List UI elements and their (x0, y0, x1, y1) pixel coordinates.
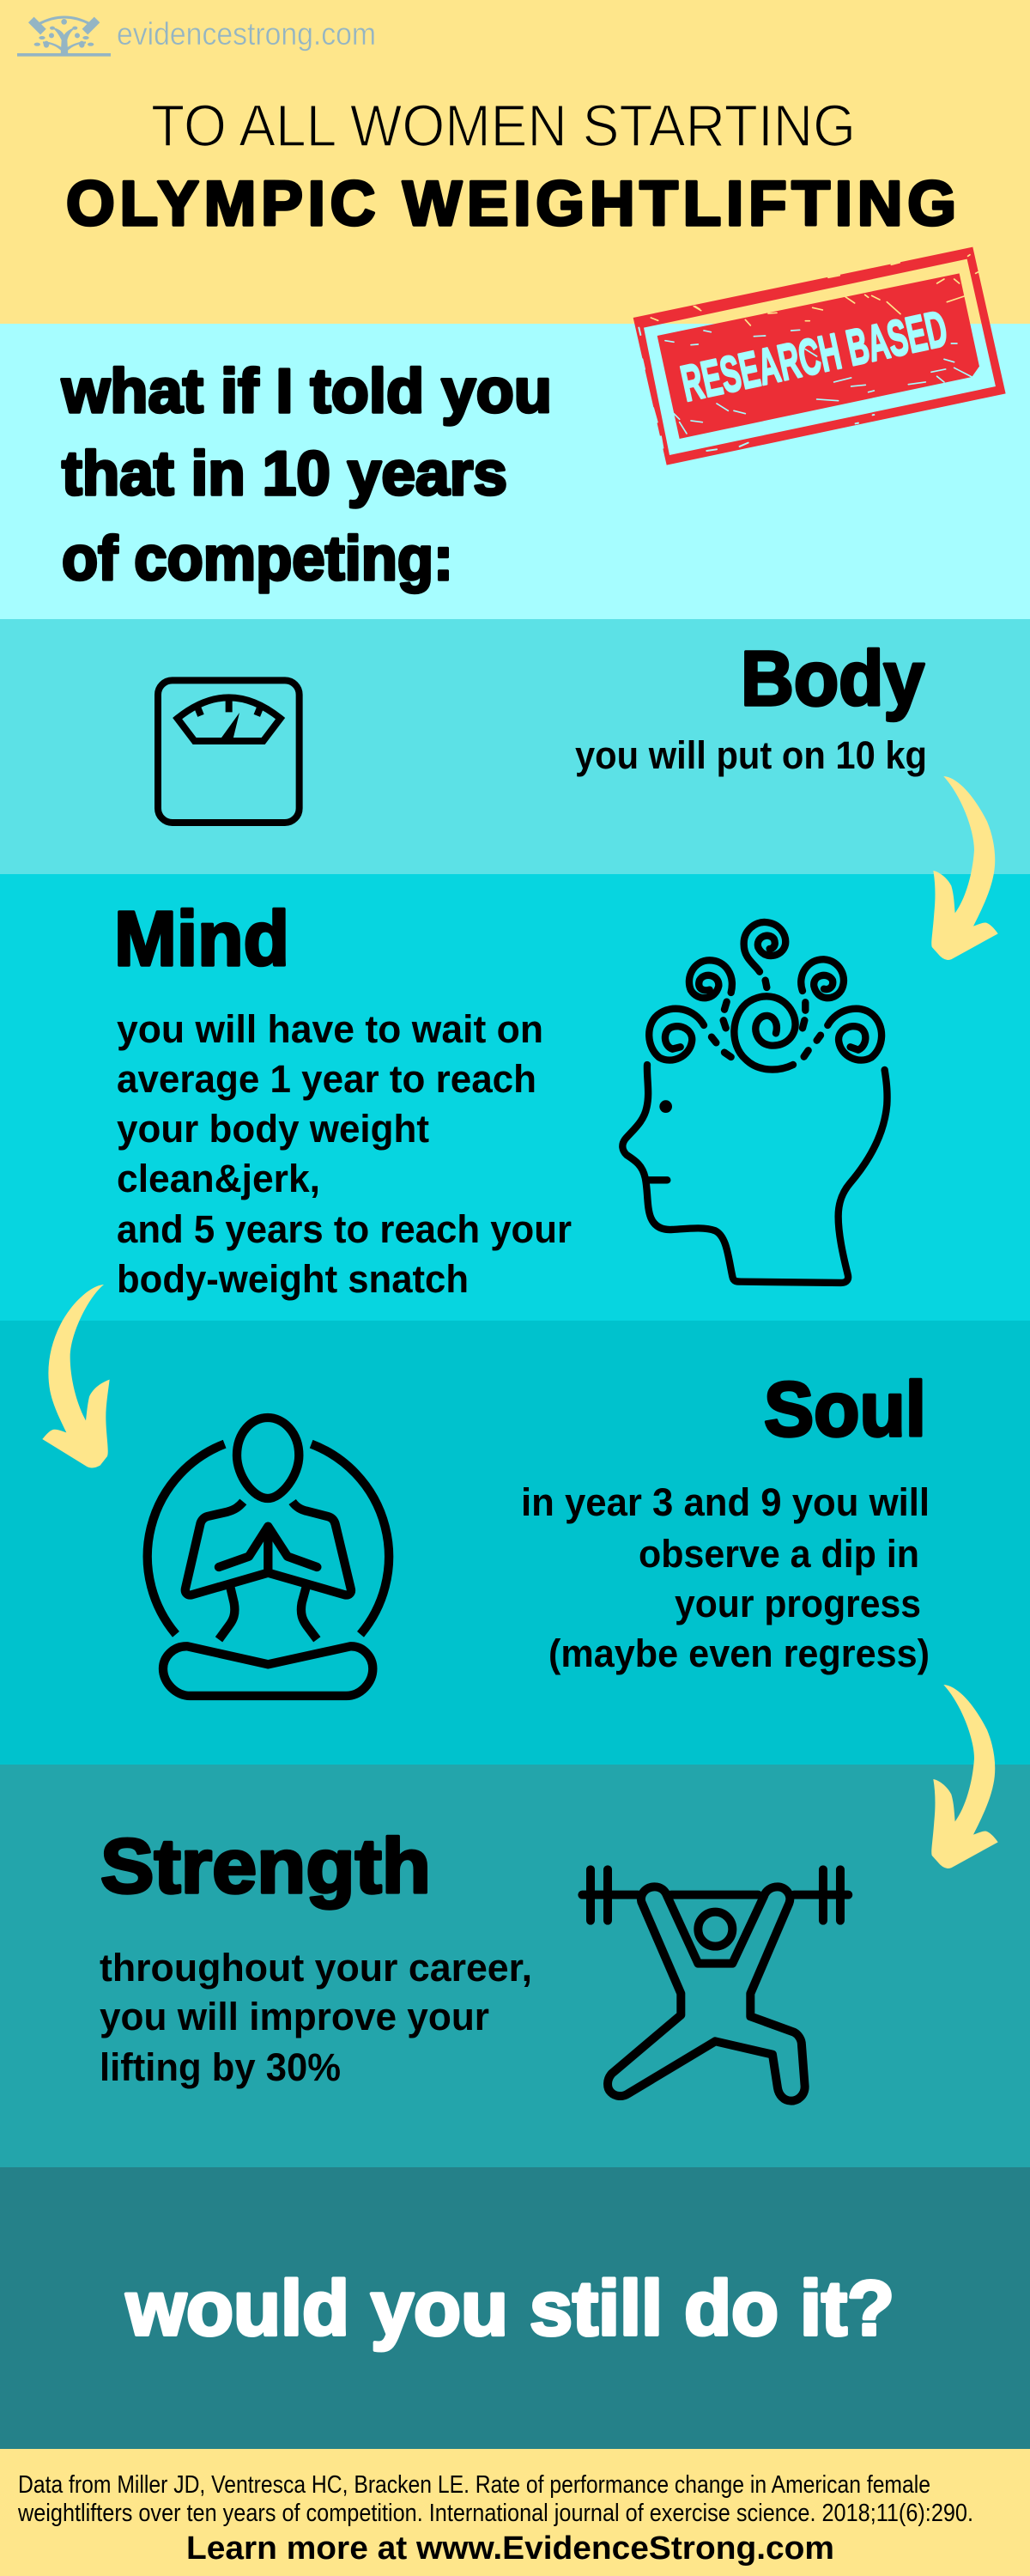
intro text: of competing: (62, 525, 453, 593)
icon: bathroom scale (158, 680, 300, 823)
panel content: strength (100, 1824, 848, 2101)
panel content: mind (114, 896, 888, 1301)
stamp inner block (657, 273, 979, 439)
text: mind description: your body weight (117, 1107, 429, 1151)
text: strength description (100, 1946, 532, 2089)
text: soul description (521, 1480, 930, 1675)
panel: closing question band (0, 2167, 1030, 2449)
intro text: what if I told you (61, 357, 552, 426)
heading: mind: Mind (114, 896, 289, 982)
title (66, 93, 956, 239)
text: strength description: you will improve your (100, 1995, 489, 2038)
heading: soul: Soul (764, 1367, 926, 1453)
panel content: soul (148, 1367, 930, 1696)
stamp: research based (633, 247, 1006, 465)
panel: footer band (0, 2449, 1030, 2576)
heading: body: Body (741, 636, 924, 722)
text: soul description: observe a dip in (639, 1532, 919, 1576)
logo: evidencestrong (17, 16, 376, 57)
panel: mind band (0, 874, 1030, 1321)
icon: weightlifter (582, 1869, 848, 2101)
closing question: would you still do it? (125, 2266, 894, 2352)
text: soul description: in year 3 and 9 you will (521, 1480, 930, 1524)
icon: head with spirals (622, 922, 888, 1283)
logo wordmark: evidencestrong.com (117, 16, 376, 52)
text: strength description: throughout your career, (100, 1946, 532, 1990)
arrow: mind to soul (42, 1285, 110, 1468)
title line one: TO ALL WOMEN STARTING (151, 93, 856, 159)
text: mind description (117, 1007, 572, 1301)
panel: header band (0, 0, 1030, 324)
citation (17, 2471, 973, 2527)
panel: body band (0, 619, 1030, 874)
arrow: body to mind (931, 776, 998, 960)
panel: intro band (0, 324, 1030, 619)
heading: strength: Strength (100, 1824, 431, 1910)
text: strength description: lifting by 30% (100, 2045, 341, 2089)
text: mind description: body-weight snatch (117, 1257, 469, 1301)
intro text: that in 10 years (62, 440, 507, 508)
text: mind description: clean&jerk, (117, 1157, 320, 1200)
intro text (61, 357, 552, 593)
text: body description: you will put on 10 kg (575, 733, 927, 777)
text: soul description: your progress (675, 1582, 921, 1625)
footer call to action: Learn more at www.EvidenceStrong.com (186, 2530, 834, 2567)
icon: meditating figure (148, 1418, 389, 1696)
icon: barbell tree (17, 17, 111, 57)
text: soul description: (maybe even regress) (548, 1631, 930, 1675)
title line two: OLYMPIC WEIGHTLIFTING (66, 169, 956, 239)
panel content: body (158, 636, 927, 823)
text: mind description: and 5 years to reach your (117, 1207, 572, 1251)
panel: soul band (0, 1321, 1030, 1765)
text: mind description: you will have to wait on (117, 1007, 543, 1051)
text: mind description: average 1 year to reach (117, 1057, 536, 1101)
panel: strength band (0, 1765, 1030, 2167)
arrow: soul to strength (931, 1685, 998, 1868)
